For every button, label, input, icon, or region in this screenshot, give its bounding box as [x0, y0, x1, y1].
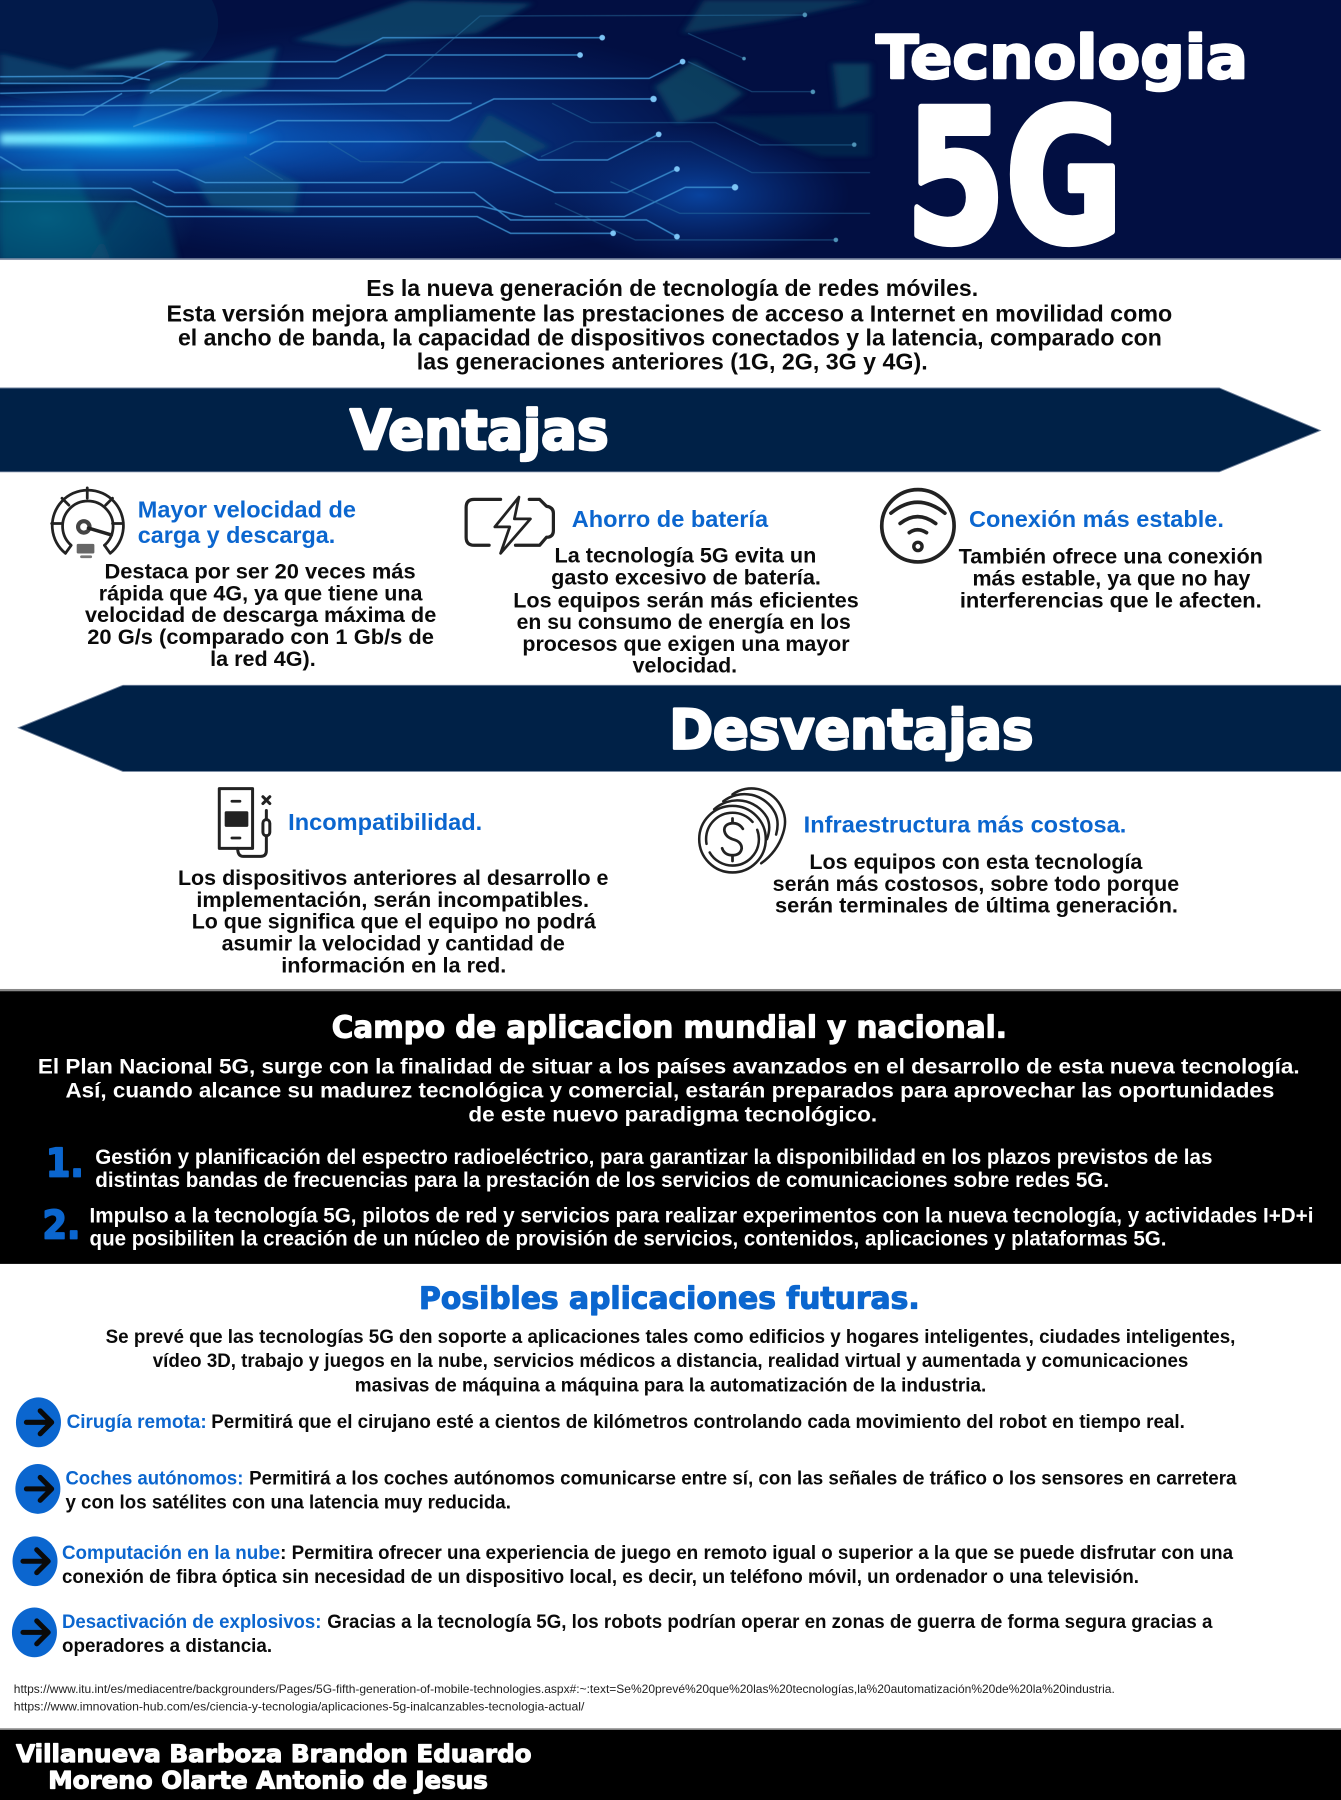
text: infraestructura: Los equipos con esta tecnología: [809, 850, 1142, 874]
list item 1: [95, 1145, 1212, 1192]
text: incompatibilidad: implementación, serán incompatibles.: [196, 888, 589, 912]
text: aplicaciones intro: Se prevé que las tecnologías 5G den soporte a aplicaciones tales como edificios y hogares inteligentes, ciudades inteligentes,: [106, 1326, 1235, 1348]
text: plan nacional: de este nuevo paradigma tecnológico.: [468, 1103, 877, 1127]
text: bateria: velocidad.: [633, 654, 737, 678]
heading: incompatibilidad: Incompatibilidad.: [288, 809, 482, 835]
icon: arrow 3: [13, 1536, 58, 1586]
item: desactivacion de explosivos: [62, 1611, 1213, 1657]
heading: Desventajas: Desventajas: [669, 698, 1033, 761]
heading: velocidad: [138, 497, 356, 548]
list item 1: Gestión y planificación del espectro radioeléctrico, para garantizar la disponibilidad en los plazos previstos de las: [95, 1145, 1212, 1169]
text: plan nacional: [38, 1054, 1300, 1127]
intro text: [166, 275, 1172, 375]
text: bateria: procesos que exigen una mayor: [522, 632, 850, 656]
text: conexion: También ofrece una conexión: [959, 545, 1263, 569]
text: incompatibilidad: [178, 866, 609, 977]
text: bateria: gasto excesivo de batería.: [551, 565, 821, 589]
text: velocidad: velocidad de descarga máxima de: [85, 603, 436, 627]
text: bateria: La tecnología 5G evita un: [555, 544, 816, 567]
text: aplicaciones intro: masivas de máquina a máquina para la automatización de la industria.: [355, 1374, 986, 1396]
number 2: 2.: [42, 1204, 80, 1249]
item: coches autonomos: y con los satélites con una latencia muy reducida.: [65, 1491, 511, 1513]
icon: battery: [466, 497, 553, 553]
advantage: conexion: [959, 506, 1263, 612]
item: desactivacion de explosivos: operadores a distancia.: [62, 1635, 272, 1657]
banner: Desventajas: [18, 685, 1341, 771]
item: cirugia remota: Permitirá que el cirujano esté a cientos de kilómetros controlando cada movimiento del robot en tiempo real.: [211, 1411, 1185, 1433]
list item 2: que posibiliten la creación de un núcleo de provisión de servicios, contenidos, aplicaciones y plataformas 5G.: [90, 1227, 1166, 1251]
item: computacion en la nube: [62, 1542, 1233, 1588]
icon: socket and plug: [219, 789, 270, 856]
icon: coins: [699, 788, 785, 872]
text: incompatibilidad: información en la red.: [281, 953, 506, 977]
sources: https://www.itu.int/es/mediacentre/backgrounders/Pages/5G-fifth-generation-of-mobile-technologies.aspx#:~:text=Se%20prevé%20que%20las%20tecnologías,la%20automatización%20de%20la%20industria.: [14, 1682, 1115, 1696]
text: bateria: en su consumo de energía en los: [517, 610, 851, 634]
item: computacion en la nube: : Permitira ofrecer una experiencia de juego en remoto igual o superior a la que se puede disfrutar con una: [280, 1542, 1233, 1564]
heading: posibles aplicaciones: Posibles aplicaciones futuras.: [419, 1282, 920, 1317]
text: incompatibilidad: asumir la velocidad y cantidad de: [222, 932, 565, 956]
intro text: Esta versión mejora ampliamente las prestaciones de acceso a Internet en movilidad como: [166, 300, 1172, 326]
text: conexion: [959, 545, 1263, 612]
heading: Ventajas: Ventajas: [350, 399, 609, 462]
list item 1: distintas bandas de frecuencias para la prestación de los servicios de comunicaciones sobre redes 5G.: [95, 1168, 1109, 1192]
advantage: velocidad: [85, 497, 436, 671]
item: desactivacion de explosivos: Desactivación de explosivos:: [62, 1611, 321, 1633]
panel: campo de aplicacion: [0, 989, 1341, 1264]
heading: velocidad: Mayor velocidad de: [138, 497, 356, 523]
footer: authors: Villanueva Barboza Brandon Eduardo: [16, 1740, 532, 1768]
text: conexion: más estable, ya que no hay: [972, 566, 1250, 590]
icon: arrow 2: [15, 1464, 60, 1514]
intro text: Es la nueva generación de tecnología de redes móviles.: [366, 275, 978, 301]
text: aplicaciones intro: [106, 1326, 1235, 1396]
text: velocidad: la red 4G).: [210, 647, 316, 671]
sources: [14, 1682, 1115, 1713]
text: bateria: [513, 544, 859, 678]
banner: Ventajas: [0, 388, 1320, 472]
text: conexion: interferencias que le afecten.: [960, 588, 1262, 612]
text: velocidad: Destaca por ser 20 veces más: [104, 560, 416, 584]
footer: authors: Moreno Olarte Antonio de Jesus: [48, 1767, 488, 1795]
sources: https://www.imnovation-hub.com/es/ciencia-y-tecnologia/aplicaciones-5g-inalcanzables-tecnologia-actual/: [14, 1699, 585, 1713]
text: velocidad: 20 G/s (comparado con 1 Gb/s de: [87, 625, 434, 649]
text: infraestructura: serán terminales de última generación.: [775, 894, 1178, 918]
icon: speedometer: [52, 488, 123, 557]
text: infraestructura: [773, 850, 1179, 918]
icon: wifi: [882, 490, 954, 562]
item: computacion en la nube: conexión de fibra óptica sin necesidad de un dispositivo local, es decir, un teléfono móvil, un ordenador o una televisión.: [62, 1566, 1139, 1588]
text: infraestructura: serán más costosos, sobre todo porque: [773, 872, 1179, 896]
text: velocidad: rápida que 4G, ya que tiene una: [99, 581, 423, 605]
intro text: el ancho de banda, la capacidad de dispositivos conectados y la latencia, comparado con: [178, 325, 1162, 351]
item: coches autonomos: [65, 1467, 1237, 1513]
heading: infraestructura: Infraestructura más costosa.: [804, 811, 1126, 837]
text: velocidad: [85, 560, 436, 671]
item: computacion en la nube: Computación en la nube: [62, 1542, 280, 1564]
number 1: 1.: [46, 1142, 84, 1187]
text: plan nacional: Así, cuando alcance su madurez tecnológica y comercial, estarán preparados para aprovechar las oportunidades: [65, 1078, 1274, 1102]
text: incompatibilidad: Los dispositivos anteriores al desarrollo e: [178, 866, 609, 890]
disadvantage: infraestructura: [773, 811, 1179, 918]
list item 2: [90, 1204, 1313, 1251]
title: Tecnologia: Tecnologia: [876, 24, 1248, 93]
item: coches autonomos: Coches autónomos:: [65, 1467, 243, 1489]
text: incompatibilidad: Lo que significa que el equipo no podrá: [192, 910, 596, 934]
icon: arrow 4: [12, 1607, 57, 1657]
heading: conexion: Conexión más estable.: [969, 506, 1224, 532]
disadvantage: incompatibilidad: [178, 809, 609, 977]
icon: arrow 1: [16, 1397, 61, 1447]
heading: campo: Campo de aplicacion mundial y nacional.: [332, 1011, 1007, 1046]
list item 2: Impulso a la tecnología 5G, pilotos de red y servicios para realizar experimentos con la nueva tecnología, y actividades I+D+i: [90, 1204, 1313, 1228]
heading: velocidad: carga y descarga.: [138, 522, 335, 548]
text: bateria: Los equipos serán más eficientes: [513, 588, 859, 612]
text: plan nacional: El Plan Nacional 5G, surge con la finalidad de situar a los países avanzados en el desarrollo de esta nueva tecnología.: [38, 1054, 1300, 1078]
item: coches autonomos: Permitirá a los coches autónomos comunicarse entre sí, con las señales de tráfico o los sensores en carretera: [249, 1467, 1237, 1489]
header banner: [0, 0, 1341, 260]
item: desactivacion de explosivos: Gracias a la tecnología 5G, los robots podrían operar en zonas de guerra de forma segura gracias a: [327, 1611, 1213, 1633]
item: cirugia remota: Cirugía remota:: [67, 1411, 207, 1433]
title: 5G: 5G: [906, 72, 1123, 285]
heading: bateria: Ahorro de batería: [572, 506, 768, 532]
intro text: las generaciones anteriores (1G, 2G, 3G y 4G).: [417, 349, 928, 375]
advantage: bateria: [513, 506, 859, 678]
text: aplicaciones intro: vídeo 3D, trabajo y juegos en la nube, servicios médicos a distancia, realidad virtual y aumentada y comunicaciones: [153, 1350, 1188, 1372]
footer: authors: [0, 1728, 1341, 1800]
